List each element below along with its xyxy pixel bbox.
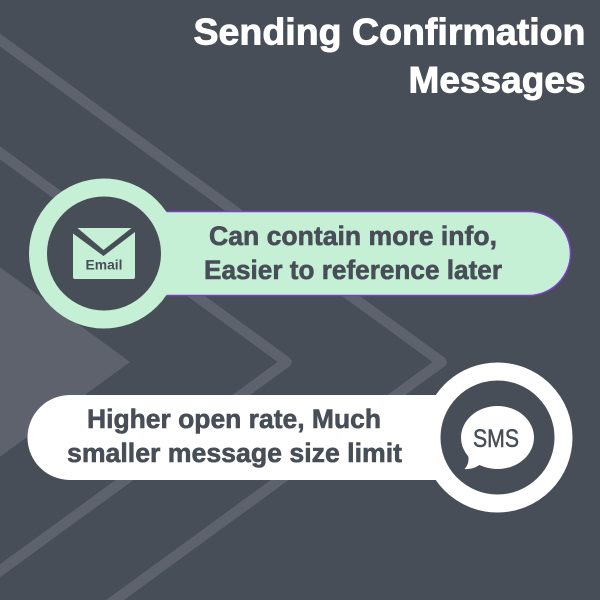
email text: Can contain more info,	[209, 221, 497, 251]
icon: email envelope: Email	[86, 256, 122, 272]
sms text: Higher open rate, Much	[87, 404, 381, 434]
panel: sms	[28, 372, 564, 504]
title: Sending Confirmation	[194, 12, 586, 52]
icon: sms bubble	[461, 406, 534, 469]
sms pill	[28, 395, 478, 480]
background chevrons	[0, 33, 442, 600]
email circle	[38, 188, 170, 320]
icon: sms bubble: SMS	[473, 425, 519, 453]
title: Messages	[408, 60, 586, 100]
email pill	[120, 212, 570, 296]
sms text: smaller message size limit	[67, 438, 402, 468]
email text: Easier to reference later	[204, 255, 502, 285]
email text	[204, 221, 502, 285]
title	[194, 12, 586, 100]
icon: email envelope	[73, 228, 135, 279]
panel: email	[38, 188, 570, 320]
sms text	[67, 404, 402, 468]
sms circle	[432, 372, 564, 504]
